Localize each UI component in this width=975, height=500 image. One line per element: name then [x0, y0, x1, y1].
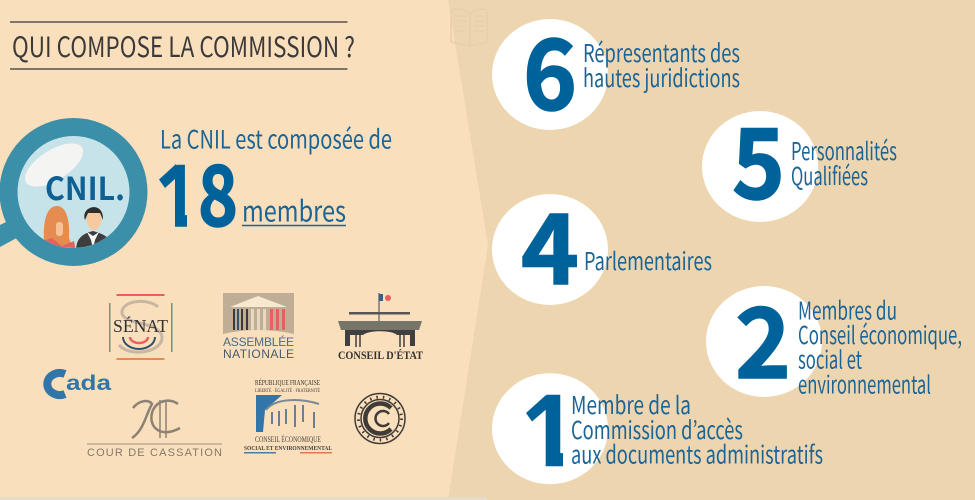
item: 4 parlementaires: [492, 171, 712, 312]
icon: faint book: [451, 9, 487, 46]
item: 5 personnalités: [702, 86, 897, 226]
item: 6 représentants: 6: [523, 0, 577, 138]
logo: Sénat: [109, 294, 172, 360]
item: 1 membre CADA: Membre de la: [571, 387, 691, 422]
logo: Conseil d'État: [338, 293, 423, 362]
logo: Conseil d'État: CONSEIL D'ÉTAT: [338, 348, 423, 362]
logo: Cada: ada: [66, 372, 111, 395]
item: 2 membres du CESE: 2: [735, 265, 791, 406]
item: 1 membre CADA: [492, 373, 822, 484]
logo: Conseil économique social et environnemental: [244, 377, 333, 454]
logo: Conseil économique social et environnemental: RÉPUBLIQUE FRANÇAISE: [255, 377, 320, 387]
item: 1 membre CADA: 1: [516, 352, 582, 494]
logo: Conseil économique social et environnemental: SOCIAL ET ENVIRONNEMENTAL: [244, 445, 333, 452]
icon: magnifying glass with CNIL: [0, 127, 138, 257]
item: 4 parlementaires: Parlementaires: [584, 243, 712, 278]
item: 2 membres du CESE: Membres du: [798, 292, 897, 328]
text: membres: membres: [242, 188, 346, 230]
logo: Cour de cassation: [87, 400, 222, 459]
item: 5 personnalités: Personnalités: [791, 133, 897, 168]
icon: magnifying glass with CNIL: CNIL.: [45, 164, 125, 210]
logo: Cada: [47, 372, 111, 395]
item: 6 représentants: hautes juridictions: [583, 60, 740, 95]
item: 6 représentants: Répresentants des: [583, 35, 740, 70]
logo: Cour de cassation: COUR DE CASSATION: [87, 447, 222, 459]
text: La CNIL est composée de: La CNIL est composée de: [160, 120, 392, 156]
logo: Assemblée nationale: ASSEMBLÉE: [223, 334, 294, 349]
bottom band: [0, 497, 487, 500]
item: 5 personnalités: Qualifiées: [791, 158, 868, 193]
item: 2 membres du CESE: [706, 265, 962, 406]
item: 6 représentants: [492, 0, 740, 138]
item: 1 membre CADA: aux documents administratifs: [571, 436, 823, 472]
logo: Conseil économique social et environnemental: CONSEIL ÉCONOMIQUE: [255, 434, 321, 444]
item: 4 parlementaires: 4: [521, 171, 579, 312]
number: 18: [159, 164, 236, 228]
logo: Cour des comptes: [355, 394, 405, 444]
panel: right background: [448, 0, 975, 500]
logo: Assemblée nationale: [223, 293, 294, 361]
logo: Sénat: SÉNAT: [113, 315, 168, 336]
logo: Assemblée nationale: NATIONALE: [223, 347, 294, 361]
item: 5 personnalités: 5: [732, 86, 785, 226]
logo: Conseil économique social et environnemental: LIBERTÉ · ÉGALITÉ · FRATERNITÉ: [255, 388, 320, 394]
item: 2 membres du CESE: social et: [798, 342, 862, 376]
number: 18: 18: [158, 130, 238, 251]
item: 1 membre CADA: Commission d’accès: [571, 412, 743, 447]
title: QUI COMPOSE LA COMMISSION ?: [12, 26, 355, 66]
